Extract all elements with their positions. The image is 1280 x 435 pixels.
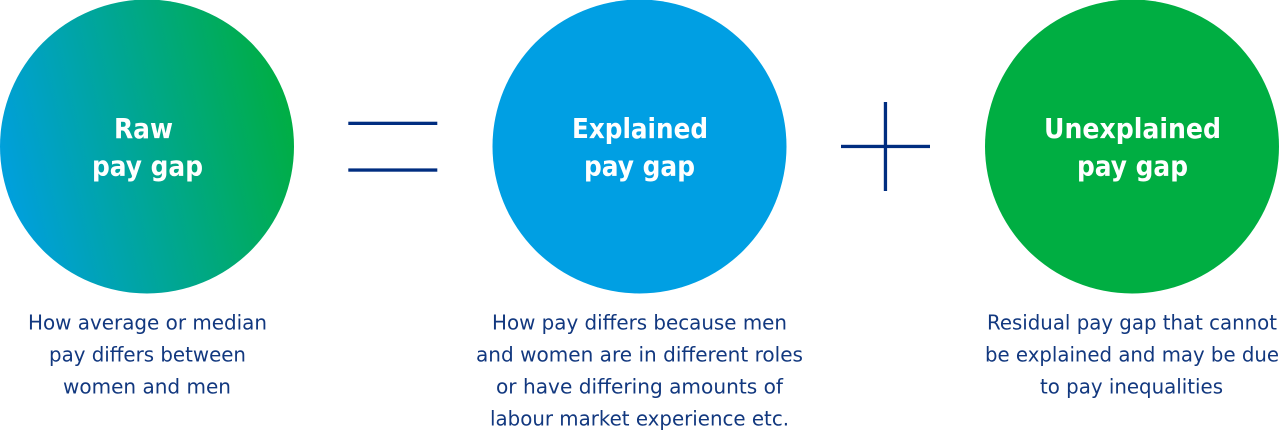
- text: raw pay gap description: [28, 310, 267, 398]
- text: raw pay gap description: women and men: [63, 374, 231, 398]
- text: explained pay gap description: [476, 310, 803, 430]
- text: explained pay gap description: and women are in different roles: [476, 342, 803, 366]
- heading: raw pay gap: [92, 112, 203, 182]
- panel: raw pay gap: [0, 0, 294, 398]
- text: explained pay gap description: or have differing amounts of: [496, 374, 784, 398]
- circle: raw pay gap: [0, 0, 294, 294]
- heading: explained pay gap: [572, 112, 708, 182]
- heading: unexplained pay gap: pay gap: [1077, 150, 1188, 182]
- heading: explained pay gap: pay gap: [584, 150, 695, 182]
- text: raw pay gap description: pay differs between: [49, 342, 246, 366]
- heading: unexplained pay gap: Unexplained: [1044, 112, 1221, 145]
- text: explained pay gap description: How pay differs because men: [492, 310, 787, 334]
- text: unexplained pay gap description: [985, 310, 1279, 398]
- icon: plus sign: [841, 102, 930, 191]
- text: raw pay gap description: How average or median: [28, 310, 267, 334]
- heading: explained pay gap: Explained: [572, 112, 708, 145]
- circle: explained pay gap: [492, 0, 786, 294]
- text: explained pay gap description: labour market experience etc.: [490, 406, 789, 430]
- text: unexplained pay gap description: to pay inequalities: [1040, 374, 1223, 398]
- panel: unexplained pay gap: [985, 0, 1279, 398]
- text: unexplained pay gap description: Residual pay gap that cannot: [987, 310, 1277, 334]
- heading: raw pay gap: pay gap: [92, 150, 203, 182]
- heading: unexplained pay gap: [1044, 112, 1221, 182]
- panel: explained pay gap: [476, 0, 803, 430]
- heading: raw pay gap: Raw: [114, 112, 173, 145]
- circle: unexplained pay gap: [985, 0, 1279, 294]
- icon: equals sign: [348, 122, 437, 172]
